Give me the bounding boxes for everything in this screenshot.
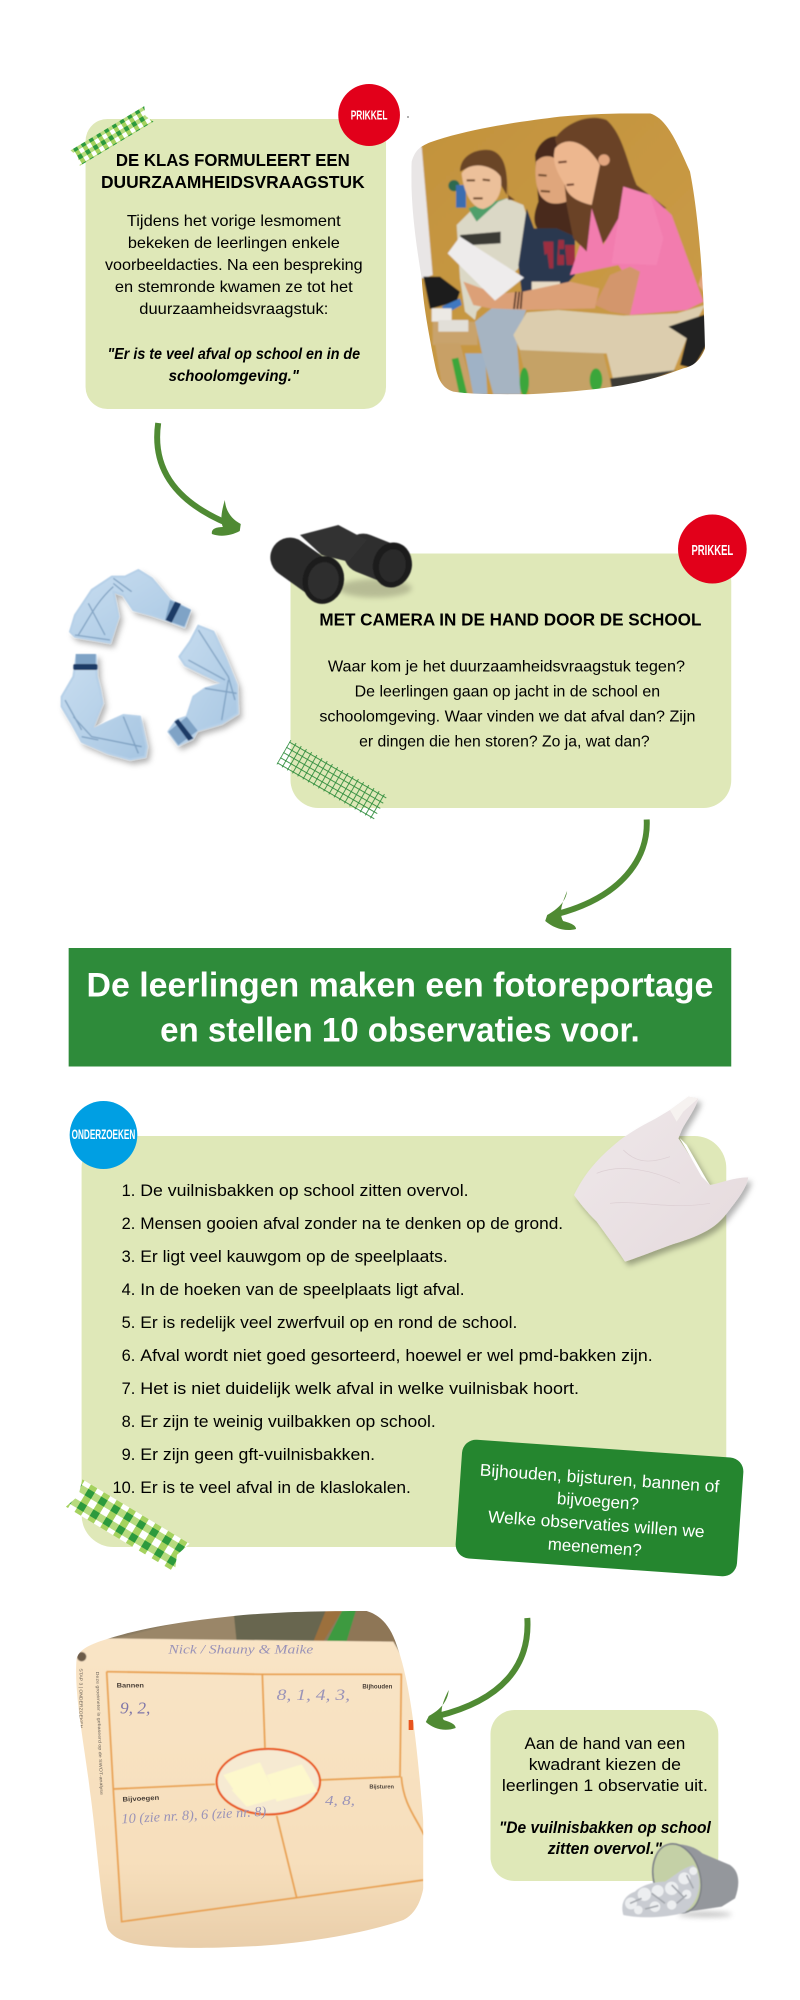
heading: met camera: MET CAMERA IN DE HAND DOOR DE SCHOOL: [319, 609, 702, 630]
icon: recycled bottles: [62, 570, 238, 759]
text: kwadrant quote: "De vuilnisbakken op school: [499, 1819, 711, 1837]
banner: fotoreportage: en stellen 10 observaties voor.: [160, 1011, 640, 1050]
banner: fotoreportage: [69, 948, 731, 1066]
panel: klas formuleert: [86, 119, 386, 409]
list: 10 observaties: 1.: [122, 1182, 135, 1200]
arrow: from klas to camera: [157, 423, 241, 536]
list: 10 observaties: 7.: [122, 1380, 135, 1398]
list: 10 observaties: 3.: [122, 1248, 135, 1266]
tape: green grid: [277, 740, 387, 820]
text: camera body: [319, 658, 695, 751]
callout: bijhouden: Welke observaties willen we: [487, 1507, 705, 1541]
badge: onderzoeken: [70, 1101, 137, 1169]
worksheet margin text: STAP 3 | ONDERZOEKEN: [78, 1668, 83, 1728]
callout: bijhouden: bijvoegen?: [556, 1489, 640, 1514]
icon: binoculars: [290, 525, 416, 608]
badge: prikkel 2: [678, 514, 747, 584]
list: 10 observaties: Er zijn te weinig vuilbakken op school.: [140, 1413, 436, 1431]
callout: bijhouden: [455, 1439, 744, 1577]
list: 10 observaties: 6.: [122, 1347, 135, 1365]
tape: green plaid top: [71, 106, 153, 166]
worksheet grid lines: [107, 1672, 424, 1922]
list: 10 observaties: Er is te veel afval in de klaslokalen.: [140, 1479, 411, 1497]
photo: kwadrant worksheet: [70, 1605, 430, 1952]
list: 10 observaties: 10.: [113, 1479, 135, 1497]
worksheet labels: Bijsturen: [369, 1784, 394, 1790]
banner: fotoreportage: De leerlingen maken een fotoreportage: [87, 966, 713, 1005]
list: 10 observaties: Er ligt veel kauwgom op de speelplaats.: [140, 1248, 448, 1266]
callout: bijhouden: Bijhouden, bijsturen, bannen of: [479, 1461, 720, 1496]
list: 10 observaties: De vuilnisbakken op school zitten overvol.: [140, 1182, 469, 1200]
text: quote vraagstuk: [107, 346, 360, 385]
worksheet labels: [117, 1682, 394, 1804]
list: 10 observaties: 9.: [122, 1446, 135, 1464]
list: 10 observaties: 4.: [122, 1281, 135, 1299]
photo: three students: [412, 113, 705, 394]
text: intro: voorbeeldacties. Na een bespreking: [105, 257, 363, 274]
worksheet handwriting: 4, 8,: [325, 1794, 355, 1809]
list: 10 observaties: 2.: [122, 1215, 135, 1233]
worksheet labels: Bijhouden: [362, 1683, 392, 1690]
tape: green plaid bottom: [66, 1479, 191, 1572]
badge: prikkel 1: [338, 84, 400, 146]
list: 10 observaties: [113, 1182, 653, 1497]
text: intro: duurzaamheidsvraagstuk:: [139, 301, 328, 318]
list: 10 observaties: Mensen gooien afval zonder na te denken op de grond.: [140, 1215, 563, 1233]
text: camera body: schoolomgeving. Waar vinden we dat afval dan? Zijn: [319, 708, 695, 726]
text: intro: [105, 213, 363, 318]
worksheet handwriting: 9, 2,: [120, 1698, 150, 1717]
text: camera body: Waar kom je het duurzaamheidsvraagstuk tegen?: [328, 658, 685, 676]
list: 10 observaties: 5.: [122, 1314, 135, 1332]
panel: kwadrant: [490, 1710, 718, 1881]
text: quote vraagstuk: schoolomgeving.": [169, 368, 299, 385]
icon: plastic bag: [574, 1097, 748, 1262]
worksheet handwriting: Nick / Shauny & Maike: [167, 1642, 314, 1656]
worksheet circle: [217, 1749, 320, 1814]
heading: de klas formuleert: DE KLAS FORMULEERT EEN: [116, 150, 350, 170]
panel: met camera: [291, 554, 731, 808]
text: kwadrant body: leerlingen 1 observatie uit.: [502, 1777, 708, 1795]
worksheet handwriting: 8, 1, 4, 3,: [277, 1687, 350, 1704]
worksheet handwriting: 10 (zie nr. 8), 6 (zie nr. 8): [121, 1805, 267, 1827]
icon: tipped waste bin: [622, 1839, 738, 1918]
arrow: from camera to banner: [545, 820, 647, 930]
heading: de klas formuleert: DUURZAAMHEIDSVRAAGSTUK: [101, 172, 365, 192]
list: 10 observaties: Het is niet duidelijk welk afval in welke vuilnisbak hoort.: [140, 1380, 579, 1398]
bottle right: [168, 626, 238, 745]
list: 10 observaties: 8.: [122, 1413, 135, 1431]
text: camera body: er dingen die hen storen? Zo ja, wat dan?: [359, 733, 650, 751]
text: camera body: De leerlingen gaan op jacht in de school en: [355, 683, 660, 701]
heading: de klas formuleert: [101, 150, 365, 192]
list: 10 observaties: Afval wordt niet goed gesorteerd, hoewel er wel pmd-bakken zijn.: [140, 1347, 653, 1365]
text: kwadrant quote: zitten overvol.": [547, 1840, 662, 1858]
text: intro: bekeken de leerlingen enkele: [128, 235, 340, 252]
badge: prikkel 2: PRIKKEL: [691, 542, 733, 559]
worksheet handwriting: [120, 1642, 355, 1827]
worksheet margin text: [78, 1668, 104, 1796]
badge: onderzoeken: ONDERZOEKEN: [72, 1126, 135, 1142]
list: 10 observaties: In de hoeken van de speelplaats ligt afval.: [140, 1281, 465, 1299]
speck: [407, 116, 409, 118]
arrow: to worksheet: [426, 1618, 528, 1730]
worksheet margin text: Deze groeimeter is gebaseerd op de SWOT-analyse: [95, 1672, 104, 1796]
text: kwadrant body: [502, 1735, 708, 1795]
text: intro: Tijdens het vorige lesmoment: [127, 213, 341, 230]
text: kwadrant body: Aan de hand van een: [525, 1735, 685, 1753]
bottle left: [62, 654, 147, 759]
bottle top: [70, 570, 191, 643]
callout: bijhouden: meenemen?: [547, 1535, 642, 1560]
text: quote vraagstuk: "Er is te veel afval op school en in de: [107, 346, 360, 363]
text: kwadrant body: kwadrant kiezen de: [529, 1756, 681, 1774]
text: kwadrant quote: [499, 1819, 711, 1858]
worksheet labels: Bijvoegen: [122, 1795, 159, 1804]
text: intro: en stemronde kwamen ze tot het: [115, 279, 353, 296]
worksheet labels: Bannen: [117, 1682, 144, 1689]
panel: observaties: [82, 1136, 726, 1547]
list: 10 observaties: Er is redelijk veel zwerfvuil op en rond de school.: [140, 1314, 517, 1332]
badge: prikkel 1: PRIKKEL: [351, 107, 388, 123]
list: 10 observaties: Er zijn geen gft-vuilnisbakken.: [140, 1446, 375, 1464]
